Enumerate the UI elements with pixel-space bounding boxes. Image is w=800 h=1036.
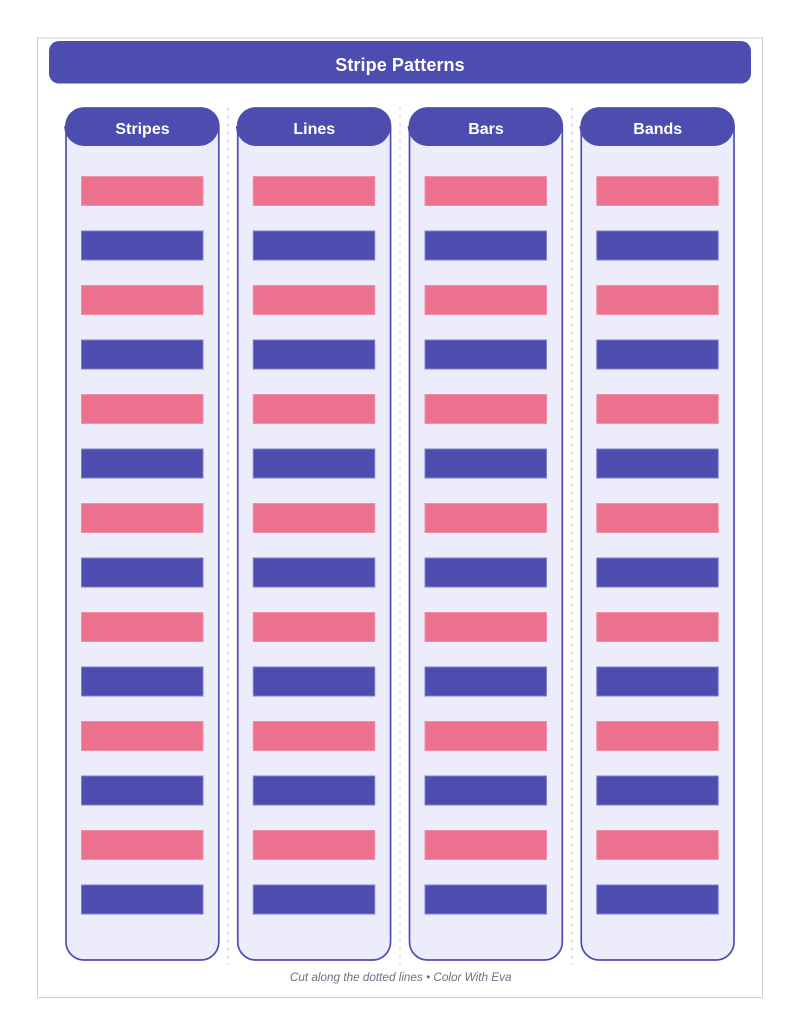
heading: Stripes (64, 108, 219, 146)
title banner (49, 41, 751, 84)
stripe bars (82, 176, 203, 914)
panel: Bands (579, 108, 734, 960)
heading: Bands (579, 108, 734, 146)
panel: Bars (408, 108, 562, 960)
heading: Bars (408, 108, 562, 146)
heading: Lines: Lines (293, 121, 335, 138)
heading: Lines (236, 108, 391, 146)
footer note: Cut along the dotted lines • Color With Eva (290, 971, 512, 984)
heading: Stripes: Stripes (115, 121, 170, 138)
bar rows (425, 176, 546, 914)
panel: Lines (236, 108, 391, 960)
band rows (597, 176, 718, 914)
heading: Bars: Bars (468, 121, 504, 138)
line bars (253, 176, 375, 914)
title banner: Stripe Patterns (335, 55, 465, 75)
heading: Bands: Bands (633, 121, 682, 138)
panel: Stripes (64, 108, 219, 960)
